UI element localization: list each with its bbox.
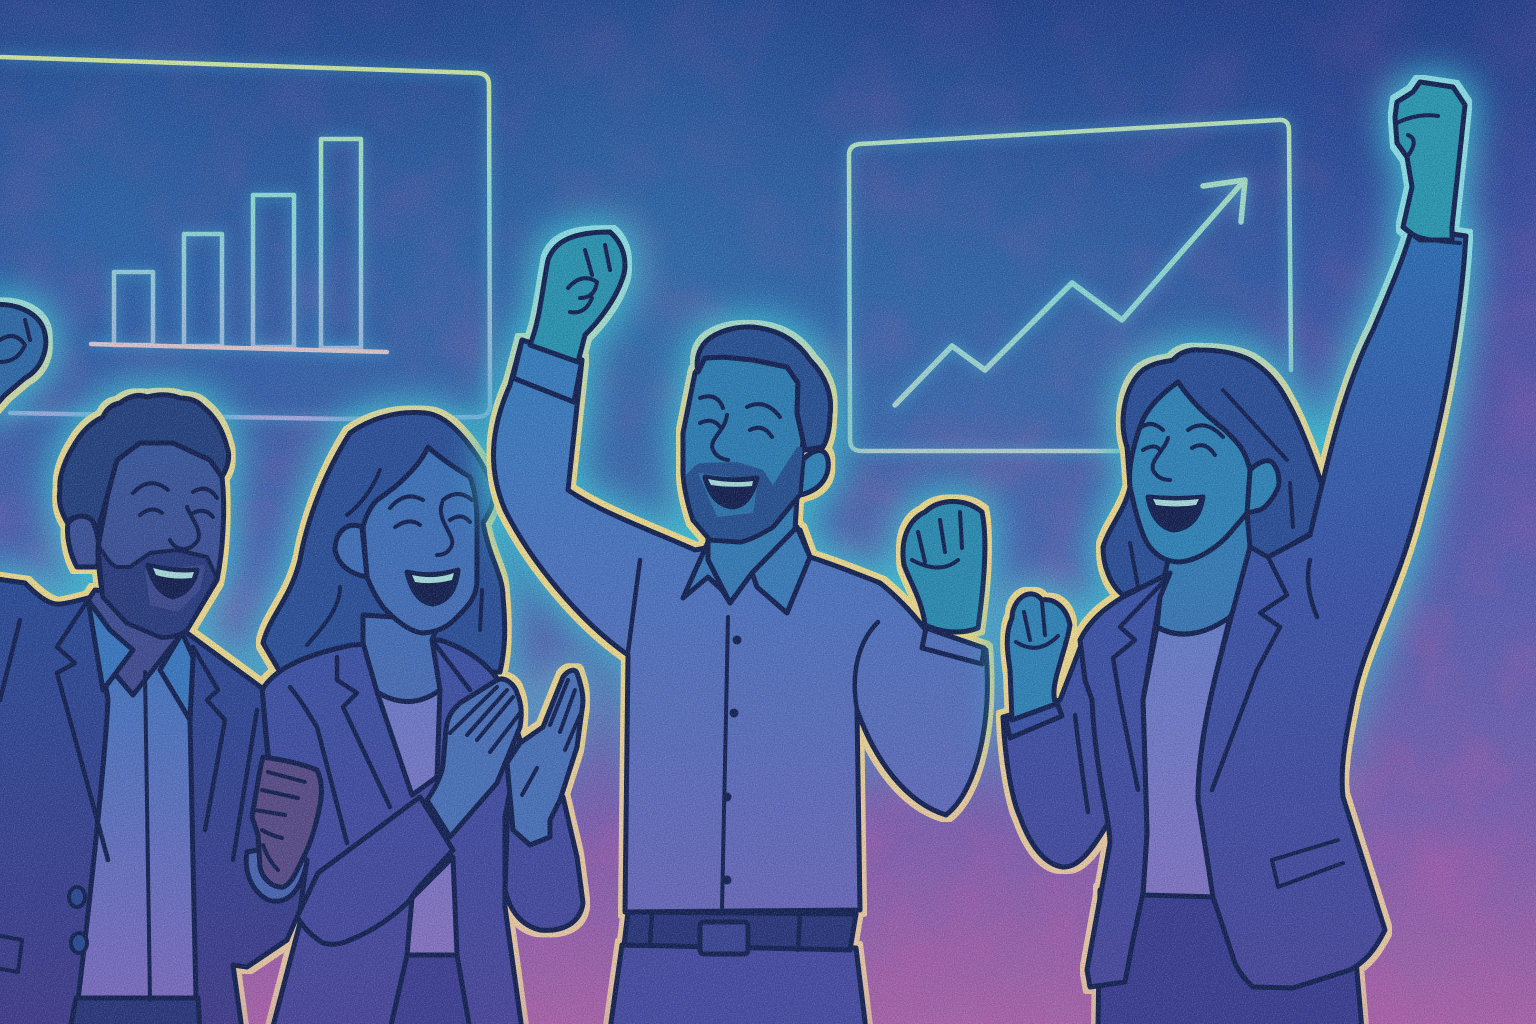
left man belt <box>70 998 200 1024</box>
hair <box>697 327 831 450</box>
left man jacket buttons <box>69 887 87 953</box>
pocket <box>1272 840 1343 887</box>
left man mouth <box>148 565 197 597</box>
belt buckle <box>700 922 748 954</box>
left man face <box>98 443 224 637</box>
belt loops <box>650 912 800 950</box>
raised fist fingers <box>1397 115 1460 243</box>
left woman right sleeve <box>505 797 583 930</box>
left woman blouse <box>377 690 457 955</box>
bars <box>114 139 361 348</box>
clapping hand left <box>427 679 521 837</box>
left man cuff <box>246 850 307 901</box>
left woman mouth <box>407 570 458 604</box>
raised fist <box>530 232 625 362</box>
left woman nose <box>437 503 452 555</box>
raised fist fingers <box>568 245 610 312</box>
right fist <box>903 502 985 632</box>
left man eyes and brows <box>133 483 217 517</box>
trend arrow <box>895 180 1245 405</box>
left man neck <box>88 590 190 695</box>
left man hair <box>59 395 229 530</box>
left man beard <box>98 545 217 637</box>
nose <box>1153 438 1170 480</box>
left man jacket <box>0 578 307 1024</box>
left man shirt <box>78 620 196 1000</box>
left man lapels <box>0 600 257 860</box>
ear <box>800 451 828 495</box>
small fist fingers <box>1016 602 1058 648</box>
cuff right <box>922 628 984 664</box>
lip patch <box>698 473 758 517</box>
left woman hair <box>263 412 505 672</box>
face <box>1129 382 1250 562</box>
clapping hand left fingers <box>450 687 520 752</box>
left woman forearm <box>297 797 453 944</box>
neck <box>708 497 797 603</box>
face <box>683 357 803 542</box>
shirt and arms <box>494 340 987 912</box>
person: right woman with raised arm <box>1003 82 1466 1024</box>
left man placket <box>145 672 150 1000</box>
collar left <box>683 542 730 603</box>
jacket right panel and raised arm <box>1198 228 1466 988</box>
left woman skirt <box>390 955 470 1024</box>
ear <box>1247 461 1279 513</box>
cuff left <box>513 340 582 402</box>
left woman teeth <box>412 573 454 583</box>
jacket left panel <box>1080 573 1170 987</box>
small fist <box>1007 594 1070 720</box>
left man teeth <box>153 568 194 579</box>
hair strands <box>1130 390 1293 587</box>
left man pocket <box>0 935 22 972</box>
chart baseline <box>91 344 387 352</box>
jaw line <box>683 473 798 542</box>
left man chin patch <box>145 565 205 612</box>
mouth <box>705 477 757 507</box>
fingers <box>0 320 30 362</box>
clapping hand right <box>507 670 583 845</box>
teeth <box>1153 499 1199 506</box>
neck <box>1157 513 1250 634</box>
teeth <box>708 479 753 487</box>
skirt <box>1098 890 1362 1024</box>
placket and buttons <box>722 617 742 910</box>
left woman jacket <box>262 640 522 1024</box>
hair <box>1103 350 1327 595</box>
collar right <box>752 527 810 613</box>
left man collar <box>88 600 193 720</box>
left woman ear <box>335 525 367 577</box>
eyes and brows <box>1138 424 1223 455</box>
left man fist <box>252 757 321 887</box>
left woman neck <box>363 615 440 702</box>
eyes and brows <box>700 396 780 437</box>
left arm sleeve <box>1003 635 1108 867</box>
left man nose <box>170 507 199 549</box>
shirt folds <box>628 560 878 710</box>
left woman eyes and brows <box>390 494 472 527</box>
person: center man cheering <box>494 232 987 1024</box>
left pair of colleagues <box>0 395 583 1024</box>
right fist fingers <box>912 512 962 568</box>
beard <box>685 447 803 542</box>
left screen: bar chart <box>0 57 490 419</box>
left woman face <box>363 447 477 633</box>
left woman hair strands <box>307 470 482 645</box>
mouth <box>1148 497 1203 530</box>
far-left raised fist <box>0 304 46 412</box>
cuff of left arm <box>1006 700 1062 738</box>
nose <box>712 415 728 460</box>
left woman lapels <box>290 640 470 843</box>
right screen: line chart with arrow <box>849 120 1291 451</box>
blouse <box>1143 617 1230 897</box>
raised fist <box>1395 82 1465 240</box>
lapels <box>1075 557 1317 812</box>
trousers <box>610 945 866 1024</box>
left man fist fingers <box>255 772 305 870</box>
clapping hand right fingers <box>522 680 580 795</box>
belt <box>624 912 856 950</box>
left man ear <box>67 516 99 567</box>
